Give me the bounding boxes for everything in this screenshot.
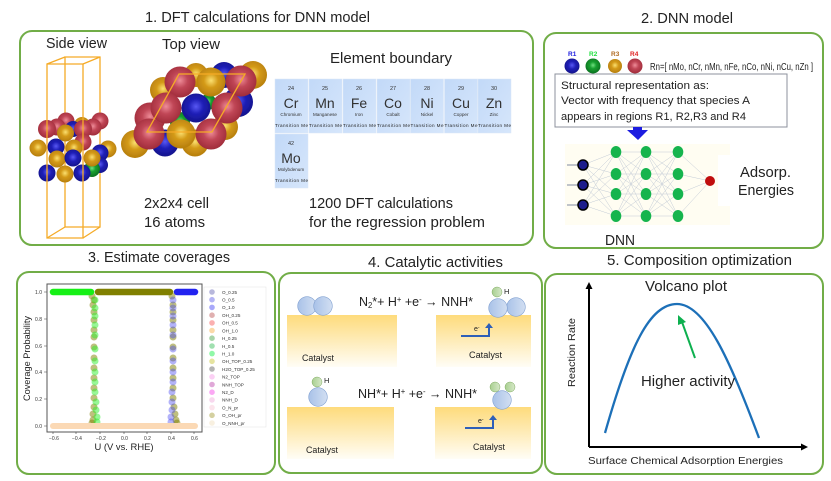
element table: Transition Me	[444, 123, 478, 128]
element table: Mo	[281, 150, 301, 166]
adsorption energies label	[738, 164, 794, 199]
x axis label: Surface Chemical Adsorption Energies	[588, 455, 783, 467]
electron transfer arrow, top: -	[478, 325, 480, 331]
arrow: representation to network	[627, 127, 648, 140]
molecule: NH on catalyst	[309, 376, 329, 406]
element table: Cr	[284, 95, 299, 111]
volcano plot title: Volcano plot	[645, 278, 728, 295]
chart legend: H2O_TOP_0.25	[222, 367, 255, 372]
structural representation box: Vector with frequency that species A	[561, 95, 751, 107]
catalyst labels	[302, 350, 505, 455]
side view label: Side view	[46, 35, 107, 52]
equation: N2 to NNH: +e	[401, 294, 419, 309]
y axis label: Coverage Probability	[22, 316, 33, 401]
element table: Copper	[453, 112, 469, 117]
side view structure	[30, 57, 116, 238]
equation: N2 to NNH: *+ H	[372, 294, 397, 309]
chart legend: OH_1.0	[222, 328, 238, 333]
molecule: NNH on catalyst: H	[504, 287, 509, 296]
element table: 26	[356, 86, 362, 92]
chart legend: O_OH_pr	[222, 413, 242, 418]
element table: 25	[322, 86, 328, 92]
element table: 24	[288, 86, 294, 92]
calculation description	[309, 195, 485, 231]
electron transfer arrow, top: e	[474, 326, 478, 333]
equation: NH to NNH: -	[423, 387, 426, 396]
coverage chart: 0.0	[35, 424, 42, 430]
region spheres R1 to R4: R3	[611, 51, 620, 58]
cell description: 16 atoms	[144, 214, 205, 231]
chart legend: OH_TOP_0.25	[222, 359, 253, 364]
chart legend: O_0.5	[222, 298, 235, 302]
element table: Transition Me	[478, 123, 511, 128]
coverage chart: 0.0	[121, 436, 128, 442]
chart legend: N2_D	[222, 390, 234, 395]
chart legend: NNH_D	[222, 398, 239, 403]
equation: NH to NNH: → NNH*	[426, 386, 477, 401]
region spheres R1 to R4	[564, 51, 642, 74]
calculation description: 1200 DFT calculations	[309, 195, 453, 212]
chart legend: O_N_pr	[222, 405, 239, 410]
element table: Chromium	[280, 112, 302, 117]
coverage chart: −0.2	[96, 436, 106, 442]
electron transfer arrow, bottom: e	[478, 418, 482, 425]
coverage chart: 0.2	[35, 397, 42, 403]
equation: N2 to NNH: N	[359, 294, 368, 309]
element table: Ni	[420, 95, 434, 111]
cell description: 2x2x4 cell	[144, 195, 209, 212]
element table: 28	[424, 86, 430, 92]
catalyst labels: Catalyst	[473, 442, 505, 452]
catalyst labels: Catalyst	[306, 445, 338, 455]
x axis label: U (V vs. RHE)	[94, 442, 154, 453]
equation: N2 to NNH: +	[397, 295, 402, 304]
element table: Manganese	[313, 112, 337, 117]
chart legend: O_0.25	[222, 290, 238, 295]
catalyst labels: Catalyst	[469, 350, 503, 360]
heading: 2. DNN model: 2. DNN model	[641, 10, 733, 27]
coverage chart: 0.2	[144, 436, 151, 442]
coverage chart	[35, 284, 202, 442]
chart legend: O_1.0	[222, 305, 235, 310]
volcano curve	[605, 304, 759, 438]
chart legend: OH_0.25	[222, 313, 241, 318]
structural representation box	[555, 74, 787, 127]
coverage chart: 0.6	[191, 436, 198, 442]
molecule: NNH on catalyst	[489, 287, 525, 317]
top view label: Top view	[162, 36, 220, 53]
element table: 42	[288, 141, 294, 147]
element table: Transition Me	[309, 123, 342, 128]
element table: Iron	[355, 112, 363, 117]
element table: Transition Me	[275, 178, 308, 183]
equation: NH to NNH: NH*+ H	[358, 386, 402, 401]
coverage chart: 1.0	[35, 290, 42, 296]
heading: 3. Estimate coverages: 3. Estimate coverages	[88, 249, 230, 266]
chart legend: OH_0.5	[222, 321, 238, 326]
electron transfer arrow, bottom	[465, 415, 497, 428]
higher activity label: Higher activity	[641, 373, 735, 390]
element table: 27	[390, 86, 396, 92]
volcano chart axes	[586, 282, 808, 450]
neural network	[565, 144, 813, 225]
element table: Transition Me	[343, 123, 376, 128]
catalyst labels: Catalyst	[302, 353, 334, 363]
heading: 5. Composition optimization: 5. Composition optimization	[607, 252, 792, 269]
region spheres R1 to R4: R1	[568, 51, 577, 58]
chart legend: H_1.0	[222, 351, 235, 356]
molecule: adsorbed N2	[298, 297, 332, 315]
molecule: NNH product	[490, 382, 515, 409]
coverage chart: 0.4	[168, 436, 175, 442]
DNN label: DNN	[605, 232, 635, 249]
element table: Cobalt	[386, 112, 400, 117]
equation: N2 to NNH: -	[419, 295, 422, 304]
heading: 4. Catalytic activities: 4. Catalytic activities	[368, 254, 503, 271]
coverage chart: 0.4	[35, 370, 42, 376]
catalyst surfaces	[287, 315, 531, 459]
coverage chart: −0.6	[49, 436, 59, 442]
chart legend: N2_TOP	[222, 375, 240, 380]
equation: NH to NNH: +e	[405, 386, 423, 401]
element table: Transition Me	[275, 123, 308, 128]
calculation description: for the regression problem	[309, 214, 485, 231]
coverage chart: 0.6	[35, 344, 42, 350]
chart legend: H_0.5	[222, 344, 235, 349]
equation: N2 to NNH: 2	[368, 301, 373, 310]
panel: coverages	[17, 272, 275, 474]
panel: DNN model	[544, 33, 823, 249]
equation: NH to NNH: +	[401, 387, 406, 396]
adsorption energies label: Energies	[738, 182, 794, 199]
electron transfer arrow, bottom: -	[482, 417, 484, 423]
element table: Transition Me	[410, 123, 444, 128]
chart legend: H_0.25	[222, 336, 237, 341]
coverage chart: 0.8	[35, 317, 42, 323]
electron transfer arrow, top	[461, 323, 493, 336]
region spheres R1 to R4: R4	[630, 51, 639, 58]
element table: Cu	[452, 95, 470, 111]
element table: Zn	[486, 95, 502, 111]
structural representation box: Structural representation as:	[561, 80, 709, 92]
element table: Fe	[351, 95, 367, 111]
top view structure	[121, 61, 267, 158]
element table: Transition Me	[377, 123, 410, 128]
element table: 29	[458, 86, 464, 92]
element table: Co	[384, 95, 402, 111]
element table	[275, 79, 511, 188]
element table: Molybdenum	[278, 167, 304, 172]
heading: 1. DFT calculations for DNN model: 1. DFT calculations for DNN model	[145, 9, 370, 26]
element table: Zinc	[490, 112, 499, 117]
equation: N2 to NNH: → NNH*	[422, 294, 473, 309]
cell description	[144, 195, 209, 231]
panel: catalytic activities	[279, 273, 542, 473]
coverage chart: −0.4	[72, 436, 82, 442]
adsorption energies label: Adsorp.	[740, 164, 791, 181]
element table: Nickel	[421, 112, 433, 117]
chart legend: O_NNH_pr	[222, 421, 245, 426]
green arrow: higher activity	[678, 315, 695, 358]
element table: 30	[491, 86, 497, 92]
chart legend	[204, 287, 266, 427]
element table: Mn	[315, 95, 335, 111]
structural representation box: appears in regions R1, R2,R3 and R4	[561, 111, 746, 123]
y axis label: Reaction Rate	[566, 318, 578, 387]
molecule: NH on catalyst: H	[324, 376, 329, 385]
chart legend: NNH_TOP	[222, 382, 244, 387]
panel: DFT calculations	[20, 31, 533, 245]
element boundary label: Element boundary	[330, 50, 452, 67]
region spheres R1 to R4: R2	[589, 51, 598, 58]
panel: composition optimization	[545, 274, 823, 474]
